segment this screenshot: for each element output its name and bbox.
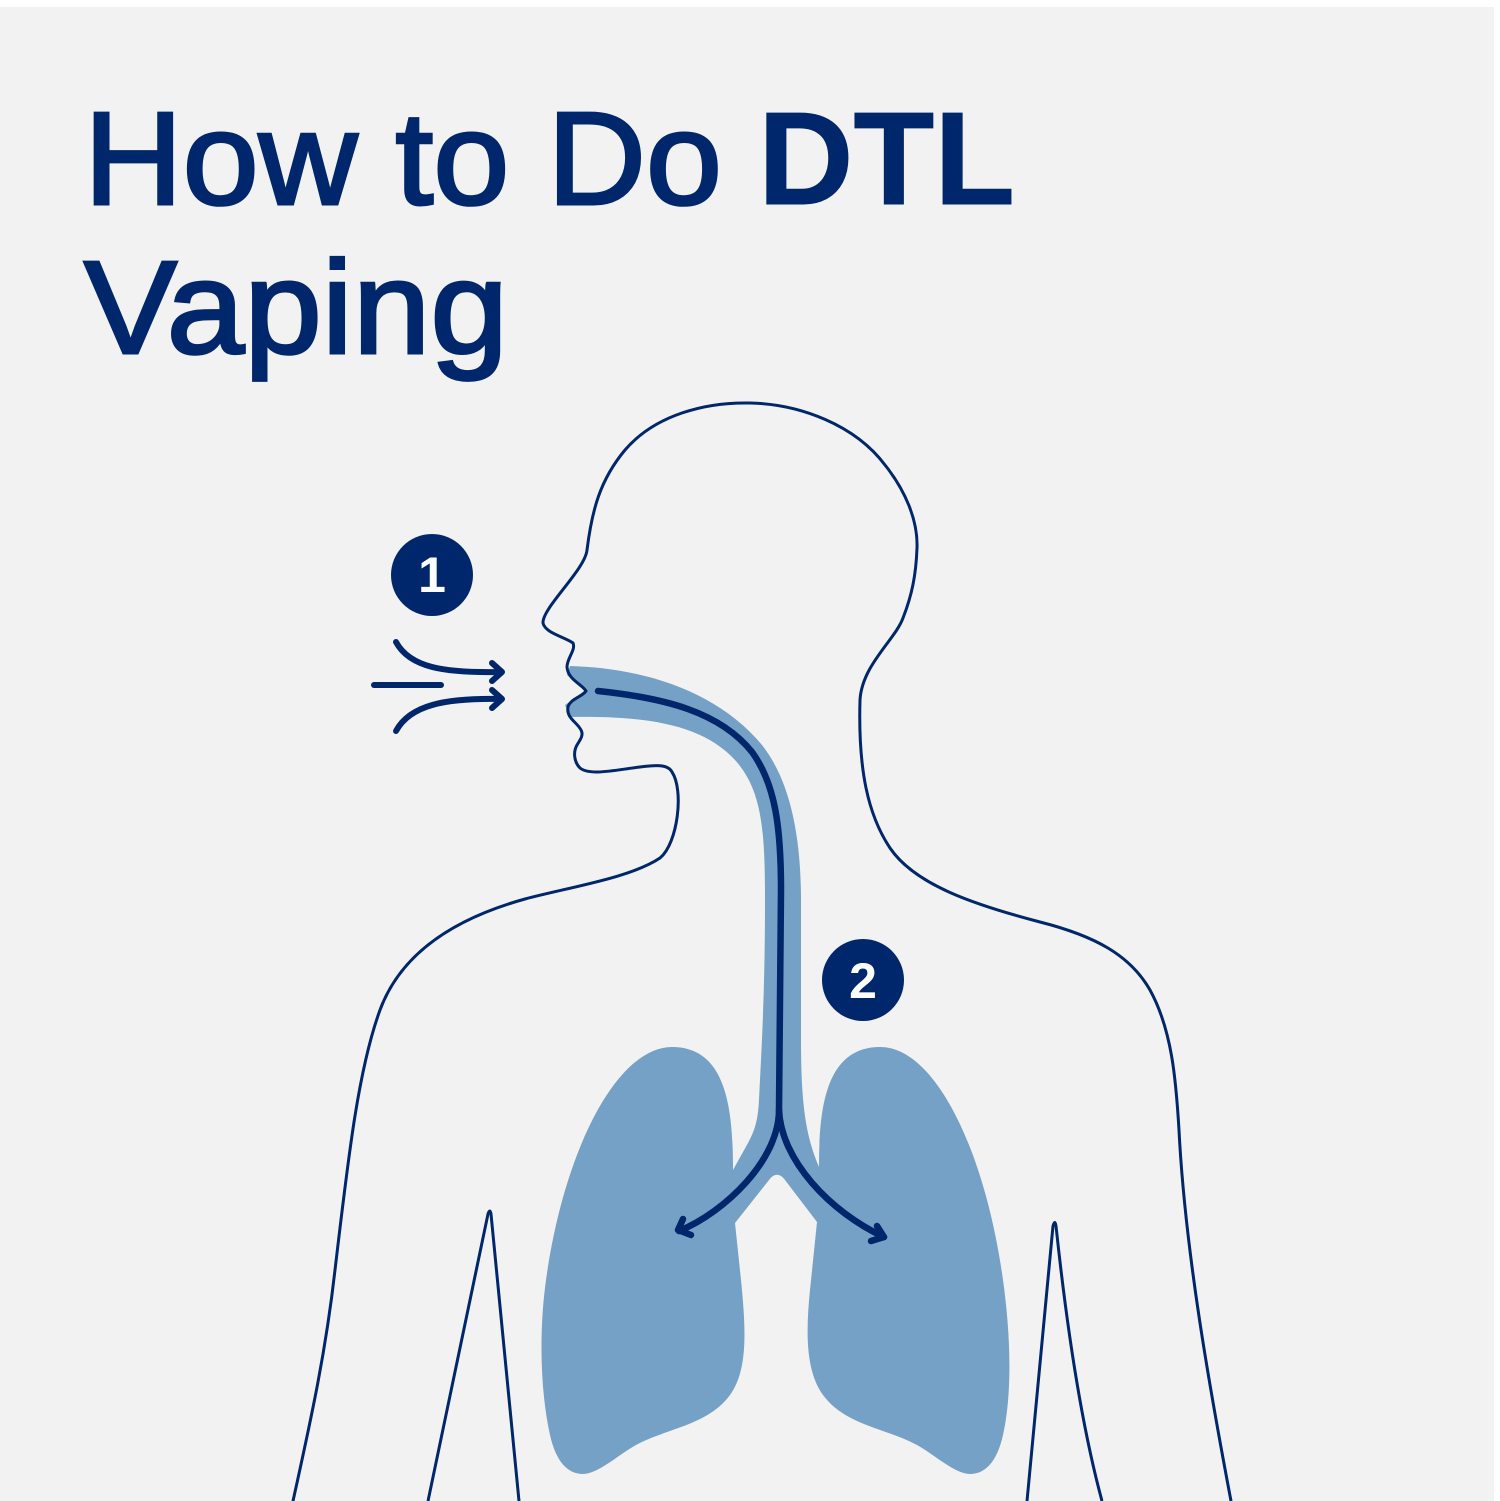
airflow path arrow through windpipe to lungs <box>598 691 884 1241</box>
step 2 badge: 2 <box>849 953 877 1009</box>
step 1 badge: 1 <box>418 547 446 603</box>
step 1 badge <box>391 534 473 616</box>
left armpit line <box>428 1211 519 1501</box>
inhale arrows icon <box>374 642 502 731</box>
lungs and airway fill <box>541 666 1009 1474</box>
title: Vaping <box>84 234 508 381</box>
title <box>84 85 1015 381</box>
right armpit line <box>1027 1222 1102 1501</box>
title: DTL <box>758 85 1015 232</box>
title: How to Do <box>84 85 722 232</box>
body outline <box>293 403 1231 1501</box>
step 2 badge <box>822 939 904 1021</box>
